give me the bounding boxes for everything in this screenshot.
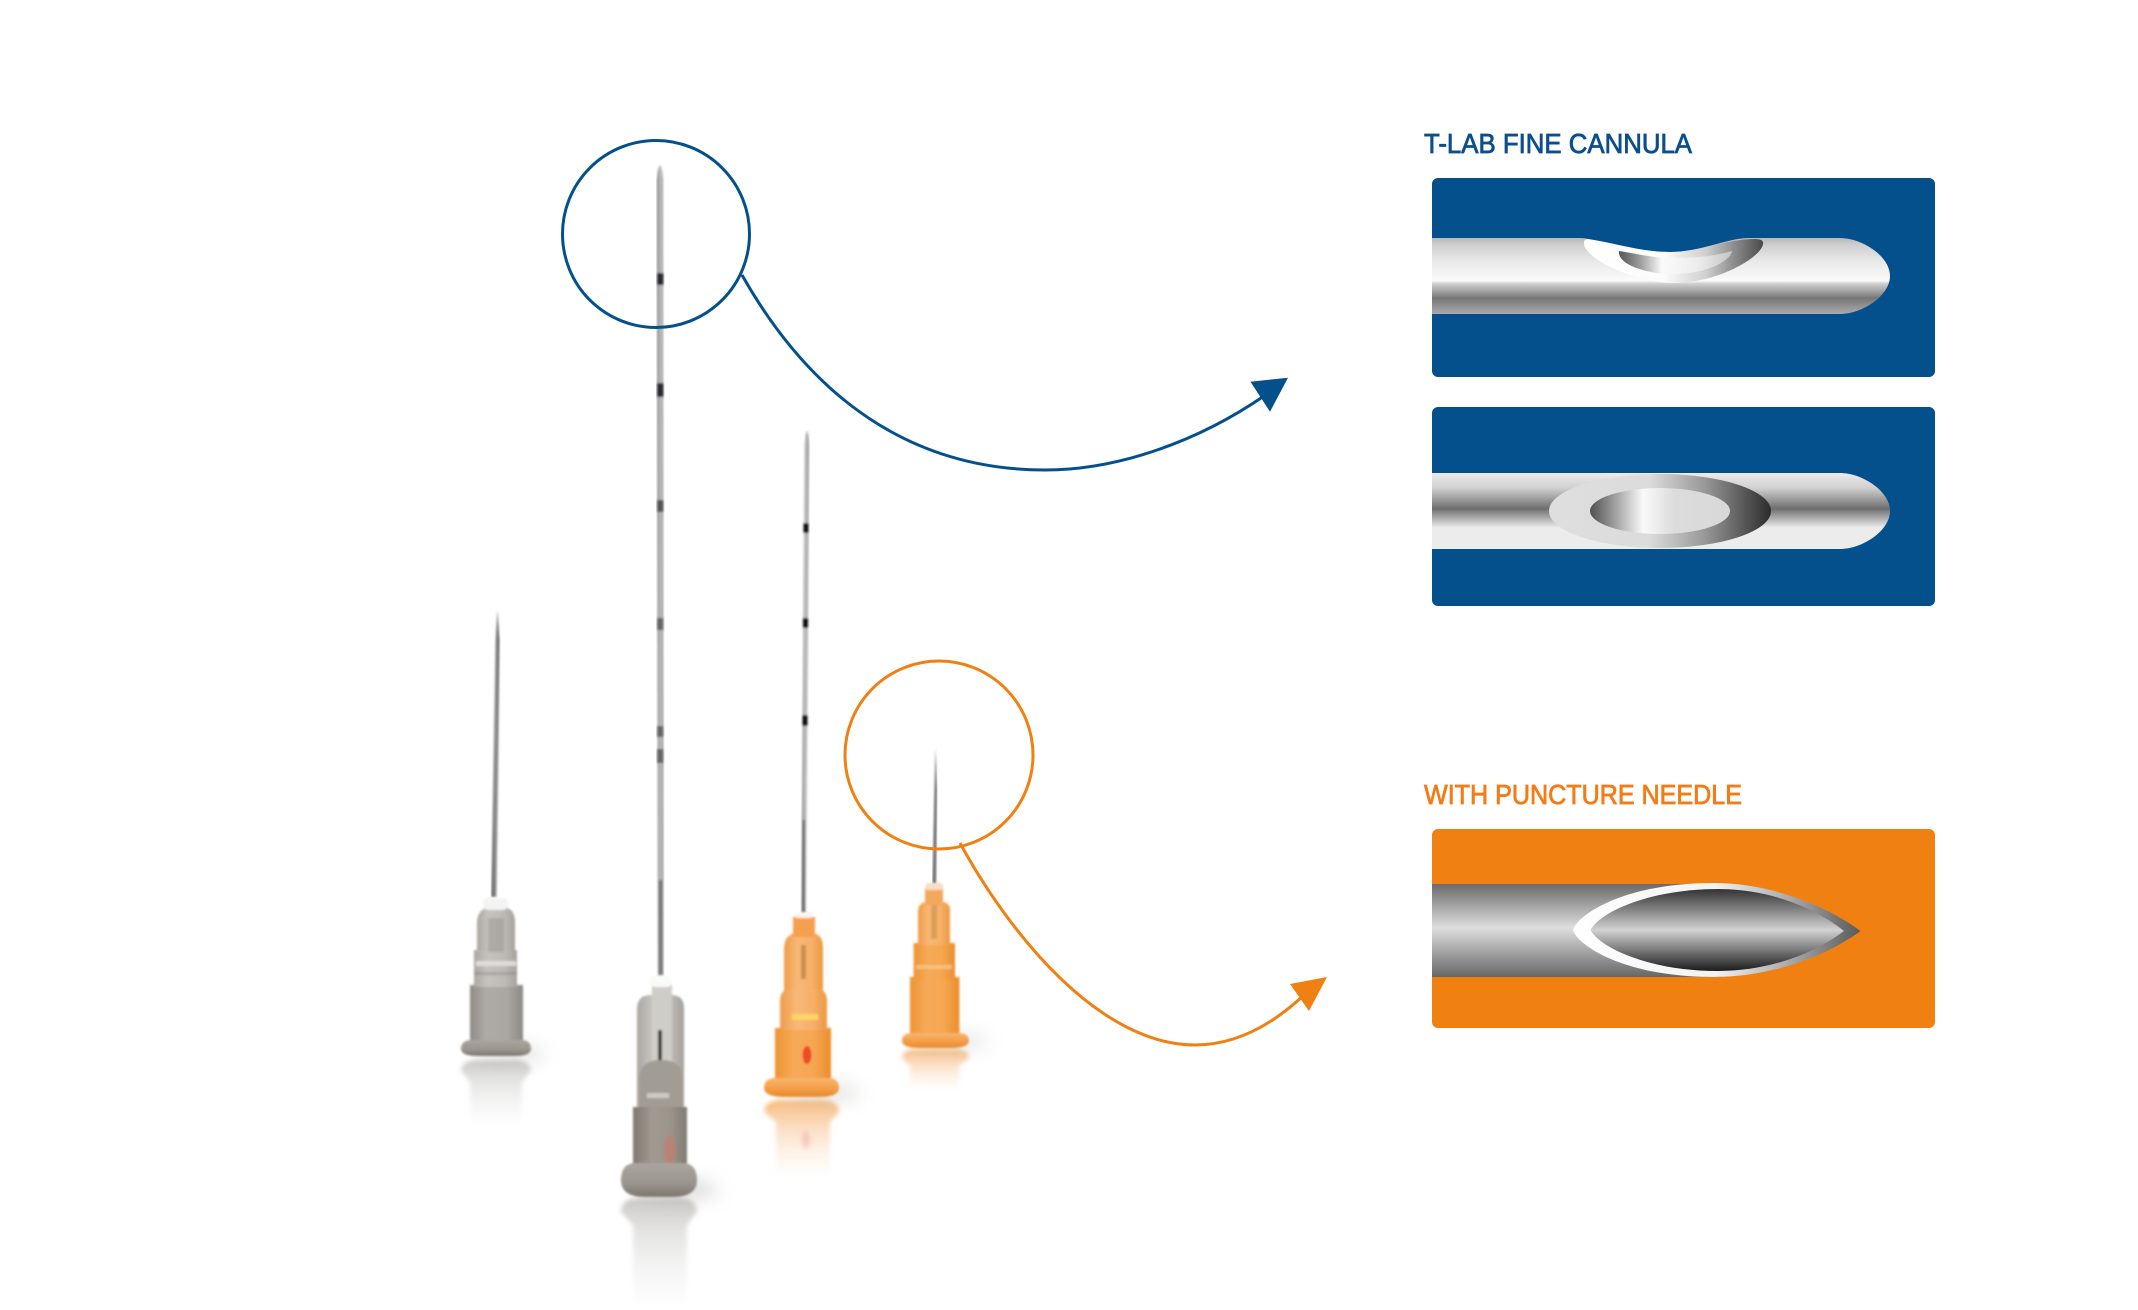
hub bbox=[461, 898, 531, 1056]
panel: cannula top view bbox=[1432, 407, 1935, 606]
heading: with puncture needle: WITH PUNCTURE NEEDLE bbox=[1424, 779, 1742, 810]
side port opening bbox=[1619, 251, 1732, 274]
side port outer rim bbox=[1584, 239, 1763, 283]
hub bbox=[902, 883, 969, 1048]
panel: puncture needle bbox=[1432, 829, 1935, 1028]
hub bbox=[621, 975, 697, 1197]
arrow: needle tip to puncture needle panel bbox=[960, 843, 1327, 1045]
callout circle: needle tip bbox=[845, 661, 1033, 849]
heading: T-LAB fine cannula: T-LAB FINE CANNULA bbox=[1424, 128, 1692, 159]
panel: cannula side view bbox=[1432, 178, 1935, 377]
needle: medium orange cannula bbox=[764, 431, 861, 1180]
port outer rim bbox=[1549, 474, 1771, 548]
reflection: long gray hub bbox=[621, 1198, 697, 1310]
shaft with depth bands bbox=[657, 165, 664, 978]
needle: long gray cannula bbox=[621, 165, 718, 1310]
reflection: medium orange hub bbox=[764, 1100, 839, 1180]
bevel opening bbox=[1590, 889, 1844, 971]
shaft bbox=[492, 610, 500, 897]
needle tube bbox=[1432, 884, 1722, 977]
bevel outer rim bbox=[1573, 883, 1860, 977]
shaft bbox=[932, 748, 937, 884]
callout circle: cannula tip bbox=[562, 140, 750, 328]
port opening bbox=[1590, 488, 1730, 534]
cannula tube top view bbox=[1432, 473, 1890, 549]
reflection: short gray hub bbox=[461, 1060, 531, 1127]
shaft with depth bands bbox=[802, 431, 809, 914]
needle: short orange puncture needle bbox=[902, 748, 989, 1092]
cannula tube side view bbox=[1432, 238, 1890, 314]
arrow: cannula tip to cannula panels bbox=[742, 275, 1288, 470]
needle: short gray cannula bbox=[461, 610, 546, 1127]
hub bbox=[764, 912, 839, 1097]
reflection: short orange hub bbox=[902, 1049, 969, 1092]
